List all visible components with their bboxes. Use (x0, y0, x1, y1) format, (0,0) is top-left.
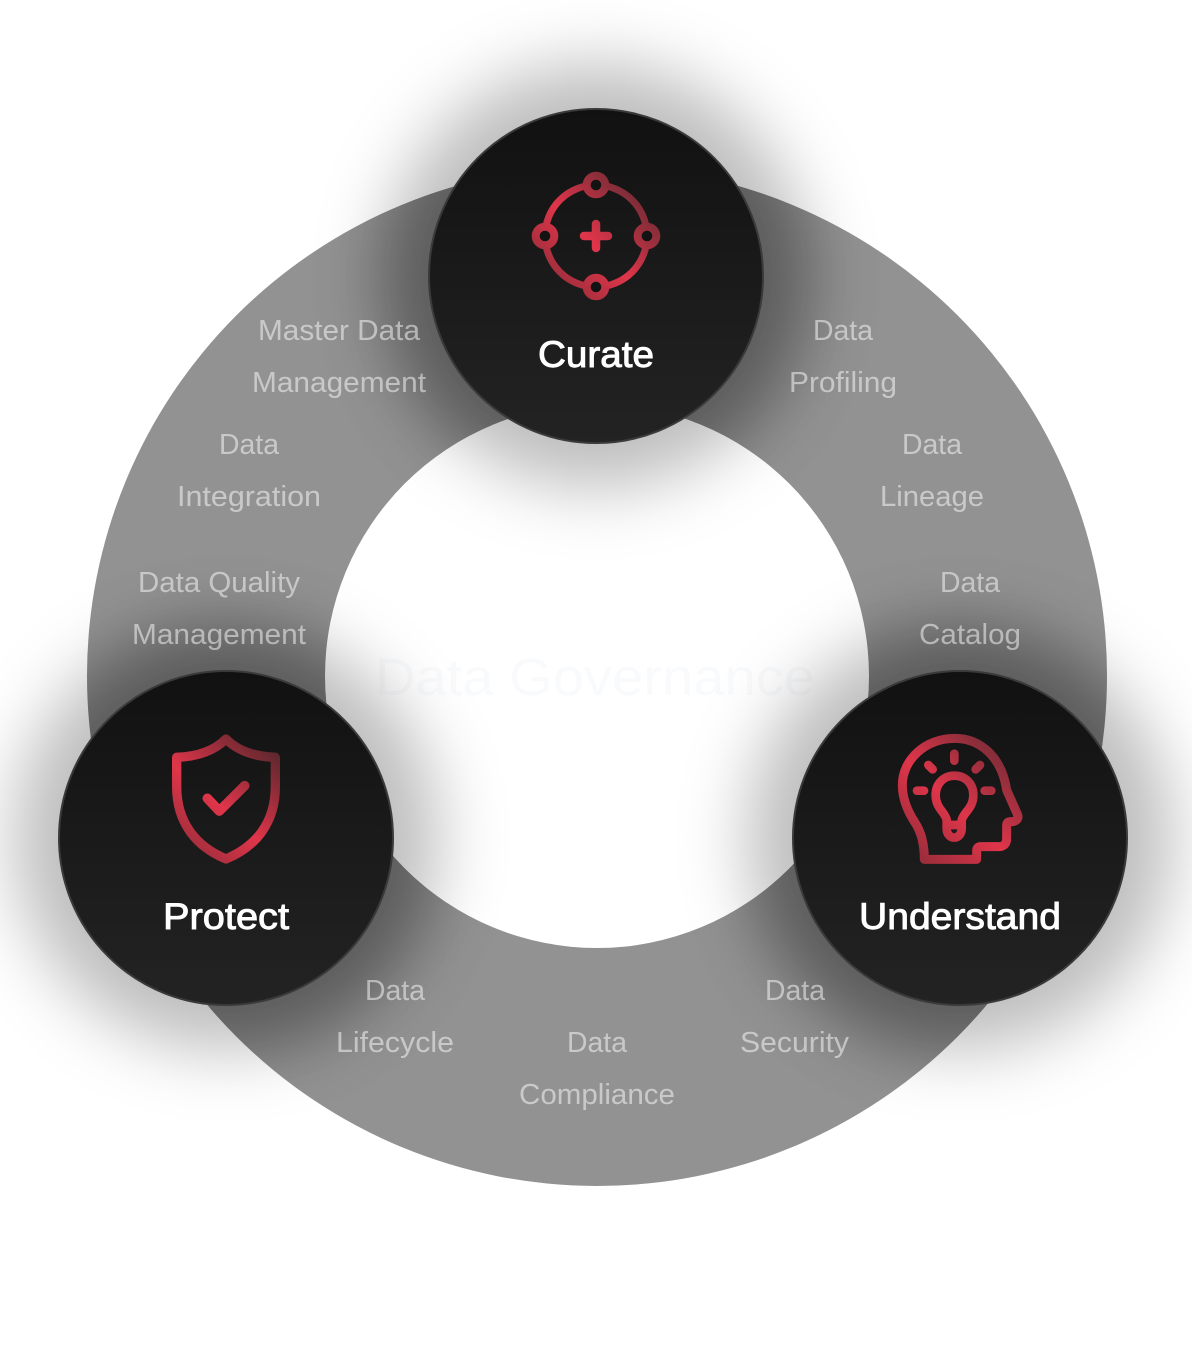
label: Data Catalog: Catalog (919, 619, 1021, 651)
label: Data Integration (177, 429, 321, 513)
labels: Curate to Protect arc (132, 315, 426, 651)
label: Data Security: Security (740, 1027, 850, 1059)
label: Data Catalog (919, 567, 1021, 651)
label: Data Compliance: Compliance (519, 1079, 675, 1111)
center title: Data Governance (375, 649, 815, 707)
labels: Curate to Understand arc (789, 315, 1021, 651)
label: Data Catalog: Data (940, 567, 1000, 599)
label: Data Lifecycle: Data (365, 975, 425, 1007)
icon: shield with check (177, 739, 275, 859)
label: Data Compliance: Data (567, 1027, 627, 1059)
label: Data Profiling: Data (813, 315, 873, 347)
circle shadows (14, 64, 1172, 1050)
icon: target with plus (536, 176, 656, 296)
label: Data Security (740, 975, 850, 1059)
label: Data Quality Management: Management (132, 619, 306, 651)
label: Data Compliance (519, 1027, 675, 1111)
node: Understand (793, 671, 1127, 1005)
heading: Understand: Understand (859, 896, 1061, 937)
label: Data Security: Data (765, 975, 825, 1007)
icon: head with light bulb (902, 738, 1018, 859)
label: Master Data Management: Master Data (258, 315, 420, 347)
label: Data Quality Management (132, 567, 306, 651)
label: Master Data Management (252, 315, 426, 399)
node: Curate (429, 109, 763, 443)
ring (87, 166, 1107, 1186)
heading: Curate: Curate (538, 334, 654, 375)
label: Data Lifecycle: Lifecycle (336, 1027, 454, 1059)
label: Data Lineage: Lineage (880, 481, 984, 513)
ring shadow deepening (87, 186, 1107, 1055)
heading: Protect: Protect (163, 896, 290, 937)
label: Data Quality Management: Data Quality (138, 567, 301, 599)
labels: Protect to Understand arc (336, 975, 850, 1111)
label: Master Data Management: Management (252, 367, 426, 399)
label: Data Lineage (880, 429, 984, 513)
label: Data Lifecycle (336, 975, 454, 1059)
label: Data Lineage: Data (902, 429, 962, 461)
label: Data Integration: Data (219, 429, 279, 461)
node: Protect (59, 671, 393, 1005)
label: Data Profiling (789, 315, 897, 399)
label: Data Integration: Integration (177, 481, 321, 513)
label: Data Profiling: Profiling (789, 367, 897, 399)
